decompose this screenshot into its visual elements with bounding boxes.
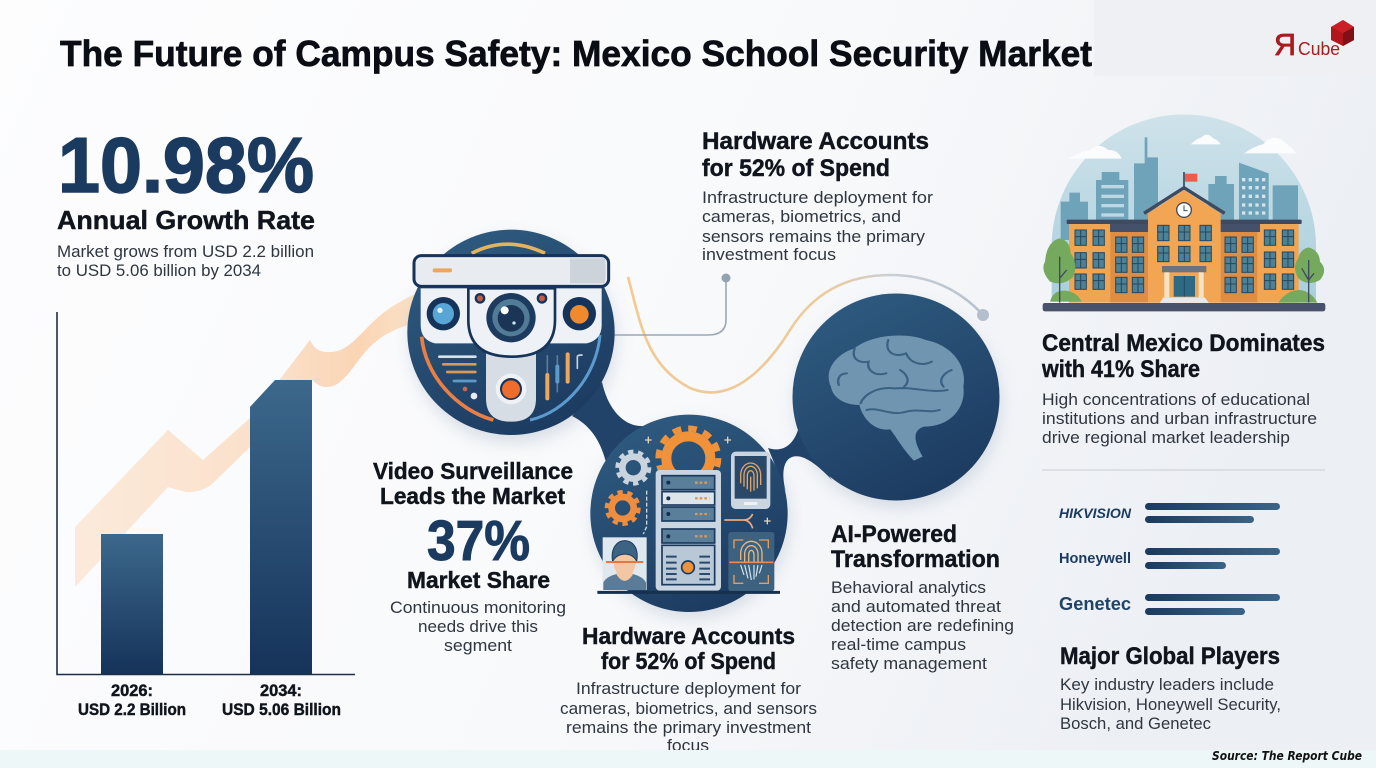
icon: hardware hub circle (590, 415, 788, 612)
title: The Future of Campus Safety: Mexico School Security Market (60, 33, 1092, 74)
soft shadows under circles (411, 238, 999, 617)
text: hardware callout: cameras, biometrics, and (702, 208, 901, 226)
growth description (57, 242, 314, 280)
text: major global players (1060, 676, 1281, 733)
heading: hardware callout (702, 128, 929, 182)
heading: video surveillance: Leads the Market (380, 483, 565, 509)
ground (1043, 303, 1325, 311)
source note: Source: The Report Cube (1212, 749, 1362, 763)
grey gear (617, 452, 649, 484)
text: hardware spend: remains the primary investment (566, 719, 811, 737)
skyline dome (1052, 114, 1316, 302)
text: AI-powered: safety management (831, 655, 987, 673)
flag (1181, 172, 1186, 190)
heading: central Mexico: with 41% Share (1041, 356, 1200, 383)
label: 2034: 2034: (260, 682, 302, 700)
text: central Mexico: High concentrations of educational (1042, 391, 1310, 409)
label: market share: Market Share (407, 567, 550, 593)
big number: market share: 37% (427, 509, 530, 573)
text: AI-powered: and automated threat (831, 598, 1001, 616)
text: AI-powered: Behavioral analytics (831, 579, 986, 597)
logo: RCube: Cube (1298, 39, 1340, 59)
text: central Mexico: institutions and urban infrastructure (1042, 410, 1317, 428)
growth description: Market grows from USD 2.2 billion (57, 242, 314, 261)
heading: video surveillance: Video Surveillance (373, 458, 573, 484)
logo: RCube: Я (1274, 27, 1296, 62)
heading: central Mexico: Central Mexico Dominates (1042, 330, 1325, 357)
dot on trend curve (977, 309, 989, 321)
logo: RCube (1274, 20, 1354, 62)
lens: centre (486, 293, 536, 342)
control panel marks (439, 354, 582, 398)
bars: Genetec (1145, 594, 1280, 615)
text: major global players: Hikvision, Honeywell Security, (1060, 696, 1281, 714)
heading: AI-powered (831, 521, 1000, 573)
phone fingerprint (731, 452, 770, 509)
heading: hardware spend: Hardware Accounts (582, 623, 795, 649)
label: 2026 (78, 682, 186, 719)
text: hardware callout: Infrastructure deployment for (702, 189, 934, 207)
chart axes (57, 312, 355, 674)
text: video surveillance: segment (444, 637, 512, 655)
text: major global players: Bosch, and Genetec (1060, 715, 1211, 733)
heading: major global players: Major Global Players (1060, 643, 1280, 670)
text: hardware spend: Infrastructure deployment for (576, 680, 802, 698)
big number: growth rate: 10.98% (58, 121, 314, 209)
label: 2034: USD 5.06 Billion (222, 701, 341, 719)
heading: hardware spend (582, 623, 795, 674)
text: hardware callout (702, 189, 934, 264)
text: video surveillance: needs drive this (418, 618, 538, 636)
growth stat block (57, 121, 315, 280)
callout leader line (610, 278, 726, 335)
lens: right (563, 297, 596, 330)
growth arrow band (75, 292, 420, 587)
lens: left (427, 297, 460, 330)
bars: Hikvision (1145, 503, 1280, 523)
label: 2034 (222, 682, 341, 719)
pendant (486, 345, 536, 422)
face scan portrait (603, 537, 647, 590)
heading: AI-powered: AI-Powered (831, 521, 957, 548)
text: AI-powered: real-time campus (831, 636, 966, 654)
bars: Honeywell (1145, 548, 1280, 569)
icon: surveillance camera circle (407, 230, 615, 435)
trees (1043, 238, 1082, 303)
small orange gear (607, 492, 639, 524)
text: AI-powered: detection are redefining (831, 617, 1014, 635)
bar chart: market size 2026 vs 2034 (57, 292, 420, 719)
fingerprint scanner (728, 532, 774, 591)
trend curve (628, 275, 983, 392)
wings and roofs (1110, 227, 1260, 303)
top-right header patch (1094, 0, 1376, 76)
icon: AI brain circle (792, 294, 1000, 500)
entrance (1162, 266, 1206, 272)
camera housing (414, 256, 609, 286)
heading: AI-powered: Transformation (831, 546, 1000, 573)
logo: Genetec: Genetec (1059, 594, 1131, 614)
server rack (656, 470, 721, 591)
connector blobs (572, 382, 832, 492)
icon: school building with city skyline (1043, 114, 1325, 311)
heading: annual growth rate: Annual Growth Rate (57, 205, 315, 235)
bar: 2034 (250, 380, 312, 674)
windows (1075, 225, 1294, 293)
text: video surveillance (390, 599, 566, 655)
text: video surveillance: Continuous monitoring (390, 599, 566, 617)
text: hardware spend (560, 680, 817, 755)
bottom band (0, 750, 1376, 768)
growth description: to USD 5.06 billion by 2034 (57, 261, 261, 280)
heading: video surveillance (373, 458, 573, 509)
skyline towers (1061, 137, 1298, 240)
players list (1059, 503, 1280, 615)
text: hardware callout: sensors remains the primary (702, 228, 926, 246)
logo: Honeywell: Honeywell (1059, 550, 1131, 567)
callout dot (722, 274, 730, 282)
label: 2026: USD 2.2 Billion (78, 701, 186, 719)
text: AI-powered (831, 579, 1014, 673)
text: hardware callout: investment focus (702, 246, 836, 264)
heading: hardware callout: for 52% of Spend (702, 155, 890, 182)
heading: hardware spend: for 52% of Spend (601, 648, 776, 674)
text: major global players: Key industry leaders include (1060, 676, 1274, 694)
text: hardware spend: cameras, biometrics, and sensors (560, 700, 817, 718)
text: central Mexico (1042, 391, 1317, 447)
heading: hardware callout: Hardware Accounts (702, 128, 929, 155)
label: 2026: 2026: (111, 682, 153, 700)
logo: Hikvision: HIKVISION (1059, 505, 1132, 521)
bar: 2026 (101, 534, 163, 674)
text: hardware spend: focus (667, 737, 709, 755)
brain glyph (829, 335, 964, 461)
text: central Mexico: drive regional market leadership (1042, 429, 1290, 447)
heading: central Mexico (1041, 330, 1325, 383)
large orange gear (658, 428, 718, 488)
